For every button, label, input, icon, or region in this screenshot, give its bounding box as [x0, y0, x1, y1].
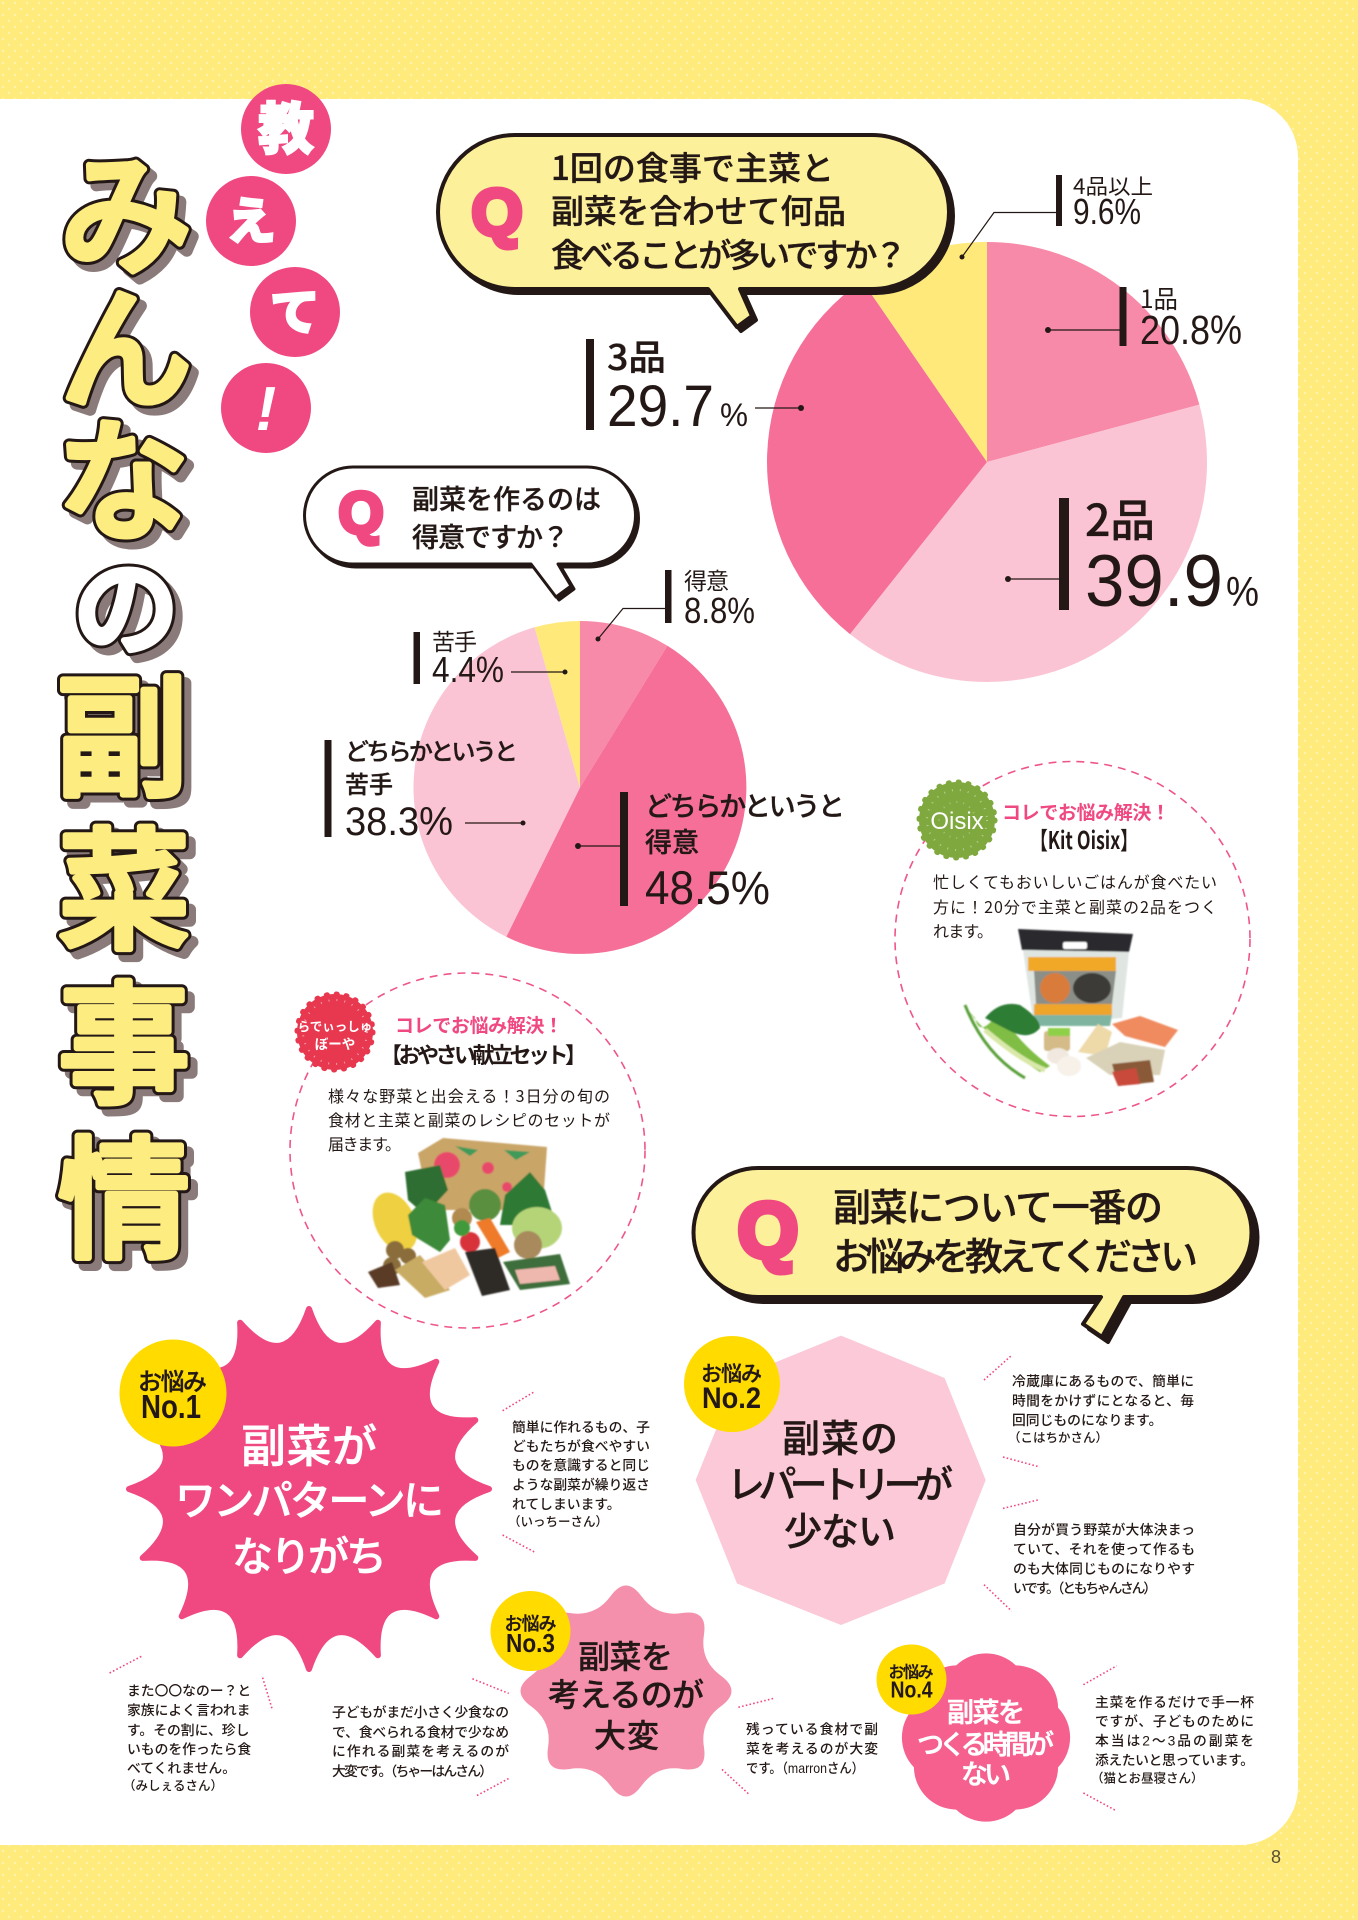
worry No.4: つくる時間が	[917, 1723, 1054, 1762]
comment: みしぇるさん: （みしぇるさん）	[123, 1779, 223, 1793]
comment: marronさん	[722, 1698, 878, 1794]
heading circles: 教えて！: て	[270, 273, 320, 345]
comment: 猫とお昼寝さん: 添えたいと思っています。	[1095, 1753, 1254, 1768]
worry No.3: 考えるのが	[548, 1670, 704, 1716]
worry No.1	[120, 1309, 489, 1669]
badge No.4: お悩み	[888, 1658, 934, 1682]
title: みんなの副菜事情: み	[60, 111, 192, 302]
comment: 猫とお昼寝さん	[1083, 1666, 1254, 1811]
badge No.3	[490, 1591, 570, 1671]
panel: Kit Oisix: 方に！20分で主菜と副菜の2品をつく	[933, 894, 1217, 918]
label: どちらかというと苦手 38.3%: 苦手	[345, 765, 393, 800]
speech bubble: question 3: Q	[738, 1186, 798, 1274]
icon: Radish Boya stamp	[297, 994, 373, 1070]
comment: 猫とお昼寝さん: 本当は2～3品の副菜を	[1095, 1734, 1254, 1748]
comment: ちゃーはんさん	[332, 1679, 509, 1796]
label: 2品 39.9%: %	[1226, 568, 1259, 615]
badge No.1	[120, 1340, 226, 1446]
label: どちらかというと苦手 38.3%: どちらかというと	[345, 732, 518, 767]
pie chart: dishes per meal	[767, 242, 1207, 682]
panel: Kit Oisix: れます。	[933, 918, 993, 942]
title: みんなの副菜事情: 情	[65, 1102, 197, 1293]
comment: marronさん: 菜を考えるのが大変	[746, 1740, 878, 1756]
comment: 猫とお昼寝さん: ですが、子どものために	[1095, 1713, 1254, 1729]
label: 2品 39.9%: 2品	[1085, 485, 1155, 549]
octagon shape	[696, 1336, 986, 1625]
comment: みしぇるさん: いものを作ったら食	[127, 1742, 251, 1757]
title: みんなの副菜事情: ん	[67, 252, 199, 443]
worry No.1: ワンパターンに	[175, 1467, 444, 1527]
worry No.2: 少ない	[784, 1501, 896, 1556]
worry No.1: なりがち	[232, 1523, 387, 1583]
label: 1品 20.8%: 20.8%	[1140, 307, 1242, 353]
panel: おやさい献立セット	[290, 973, 645, 1328]
comment: いっちーさん	[503, 1392, 650, 1552]
photo: vegetable box	[364, 1138, 570, 1298]
title: みんなの副菜事情: み	[67, 118, 199, 309]
panel: おやさい献立セット: 【おやさい献立セット】	[380, 1038, 587, 1070]
title: みんなの副菜事情: 菜	[58, 786, 190, 977]
comment: こはちかさん: 回同じものになります。	[1012, 1413, 1162, 1428]
icon: Radish Boya stamp: らでぃっしゅ	[298, 1016, 372, 1035]
title: みんなの副菜事情: な	[57, 377, 189, 568]
burst shape	[129, 1309, 489, 1669]
label: 得意 8.8%: 得意	[684, 562, 729, 596]
comment: みしぇるさん: また〇〇なのー？と	[127, 1684, 251, 1698]
title: みんなの副菜事情: 副	[56, 633, 188, 824]
comment: ちゃーはんさん: 子どもがまだ小さく少食なの	[332, 1704, 509, 1720]
title: みんなの副菜事情: 事	[58, 940, 190, 1131]
comment: みしぇるさん: す。その割に、珍し	[127, 1722, 249, 1738]
comment: いっちーさん: ような副菜が繰り返さ	[512, 1476, 650, 1492]
label: 4品以上 9.6%	[960, 171, 1153, 260]
label: どちらかというと苦手 38.3%	[324, 732, 526, 844]
title: みんなの副菜事情: 菜	[65, 793, 197, 984]
speech bubble: question 1: 1回の食事で主菜と	[551, 142, 834, 190]
comment: いっちーさん: （いっちーさん）	[508, 1515, 608, 1529]
comment: こはちかさん	[984, 1355, 1194, 1467]
label: どちらかというと得意 48.5%: 得意	[645, 821, 699, 860]
comment: ともちゃんさん	[984, 1500, 1195, 1611]
speech bubble: question 2: Q	[338, 481, 384, 546]
title: みんなの副菜事情: 事	[65, 947, 197, 1138]
worry No.2: レパートリーが	[727, 1454, 953, 1509]
title: みんなの副菜事情: な	[57, 377, 189, 568]
title: みんなの副菜事情: 副	[56, 633, 188, 824]
badge No.1: お悩み	[138, 1362, 207, 1397]
comment: marronさん: です。（marronさん）	[746, 1761, 864, 1776]
comment: marronさん: 残っている食材で副	[746, 1721, 878, 1737]
badge No.3: お悩み	[504, 1610, 556, 1636]
title: みんなの副菜事情: 情	[58, 1095, 190, 1286]
badge No.3: No.3	[506, 1628, 555, 1658]
badge No.4: No.4	[890, 1676, 933, 1702]
label: どちらかというと得意 48.5%: どちらかというと	[645, 785, 845, 824]
worry No.1: 副菜が	[241, 1410, 377, 1475]
panel: おやさい献立セット: 様々な野菜と出会える！3日分の旬の	[328, 1083, 610, 1107]
speech bubble: question 3	[694, 1168, 1258, 1342]
panel: Kit Oisix	[895, 762, 1250, 1116]
panel: Kit Oisix: 【Kit Oisix】	[1030, 821, 1138, 856]
heading circles: 教えて！: 教	[258, 85, 314, 166]
comment: こはちかさん: 時間をかけずにとなると、毎	[1012, 1394, 1194, 1408]
badge No.2: No.2	[702, 1382, 761, 1415]
comment: ともちゃんさん: ていて、それを使って作るも	[1013, 1542, 1195, 1557]
comment: こはちかさん: 冷蔵庫にあるもので、簡単に	[1012, 1373, 1194, 1389]
speech bubble: question 1: 食べることが多いですか？	[551, 229, 907, 277]
comment: ともちゃんさん: 自分が買う野菜が大体決まっ	[1013, 1522, 1195, 1538]
label: 4品以上 9.6%: 9.6%	[1073, 191, 1141, 232]
panel: おやさい献立セット: 届きます。	[328, 1131, 401, 1155]
label: 2品 39.9%: 39.9	[1085, 541, 1223, 622]
worry No.4	[876, 1644, 1070, 1822]
title: みんなの副菜事情: ん	[60, 245, 192, 436]
title: みんなの副菜事情: 事	[58, 940, 190, 1131]
label: 2品 39.9%	[1005, 485, 1259, 622]
label: 苦手 4.4%: 苦手	[432, 623, 477, 657]
comment: いっちーさん: れてしまいます。	[512, 1497, 621, 1512]
comment: こはちかさん: （こはちかさん）	[1008, 1431, 1108, 1445]
title: みんなの副菜事情: ん	[60, 245, 192, 436]
page number: 8	[1271, 1847, 1281, 1867]
badge No.2: お悩み	[701, 1358, 762, 1388]
worry No.2: 副菜の	[782, 1408, 898, 1463]
label: 3品 29.7%: 29.7	[607, 374, 714, 439]
comment: みしぇるさん: べてくれません。	[127, 1761, 236, 1776]
icon: Radish Boya stamp: ぼーや	[315, 1033, 355, 1053]
panel: おやさい献立セット: 食材と主菜と副菜のレシピのセットが	[328, 1107, 610, 1131]
label: 苦手 4.4%: 4.4%	[432, 649, 504, 690]
label: どちらかというと得意 48.5%	[575, 785, 845, 914]
label: 3品 29.7%: %	[720, 397, 748, 433]
icon: Oisix stamp	[919, 782, 995, 858]
label: どちらかというと得意 48.5%: 48.5%	[645, 861, 770, 914]
title: みんなの副菜事情: の	[73, 525, 179, 677]
comment: ちゃーはんさん: 大変です。（ちゃーはんさん）	[332, 1764, 493, 1779]
worry No.3: 副菜を	[578, 1632, 673, 1678]
title: みんなの副菜事情: な	[64, 384, 196, 575]
label: 3品 29.7%: 3品	[607, 330, 666, 381]
speech bubble: question 3: 副菜について一番の	[833, 1177, 1163, 1232]
panel: Kit Oisix: コレでお悩み解決！	[1002, 798, 1170, 825]
label: 1品 20.8%	[1045, 280, 1242, 353]
label: 4品以上 9.6%: 4品以上	[1073, 171, 1153, 201]
comment: 猫とお昼寝さん: （猫とお昼寝さん）	[1091, 1772, 1204, 1786]
heading circles: 教えて！: え	[226, 182, 276, 254]
icon: Oisix stamp: Oisix	[930, 808, 984, 835]
title: みんなの副菜事情	[56, 111, 199, 1293]
speech bubble: question 2: 副菜を作るのは	[412, 478, 601, 517]
comment: ともちゃんさん: のも大体同じものになりやす	[1013, 1562, 1195, 1576]
comment: いっちーさん: 簡単に作れるもの、子	[512, 1419, 650, 1435]
heading circles: 教えて！: !	[256, 375, 276, 444]
comment: ちゃーはんさん: で、食べられる食材で少なめ	[332, 1725, 509, 1740]
title: みんなの副菜事情: の	[73, 525, 179, 677]
title: みんなの副菜事情: み	[60, 111, 192, 302]
comment: ともちゃんさん: いです。（ともちゃんさん）	[1013, 1581, 1157, 1596]
photo: meal kit	[963, 929, 1178, 1086]
flower shape	[902, 1653, 1070, 1822]
label: 得意 8.8%	[596, 562, 755, 642]
panel: おやさい献立セット: コレでお悩み解決！	[395, 1011, 563, 1038]
label: 1品 20.8%: 1品	[1140, 280, 1178, 316]
comment: みしぇるさん: 家族によく言われま	[127, 1702, 250, 1718]
heading circles: 教えて！	[206, 84, 340, 453]
comment: ちゃーはんさん: に作れる副菜を考えるのが	[332, 1743, 509, 1759]
worry No.3	[490, 1586, 731, 1796]
speech bubble: question 1: Q	[471, 175, 523, 249]
speech bubble: question 3: お悩みを教えてください	[833, 1226, 1198, 1281]
comment: 猫とお昼寝さん: 主菜を作るだけで手一杯	[1095, 1694, 1254, 1710]
comment: みしぇるさん	[110, 1656, 272, 1793]
worry No.2	[684, 1336, 986, 1625]
speech bubble: question 1: 副菜を合わせて何品	[551, 185, 846, 233]
pie chart: confidence at side dishes	[413, 621, 746, 954]
title: みんなの副菜事情: 副	[63, 640, 195, 831]
title: みんなの副菜事情: の	[80, 532, 186, 684]
badge No.4	[876, 1644, 946, 1714]
worry No.3: 大変	[594, 1711, 659, 1757]
panel: Kit Oisix: 忙しくてもおいしいごはんが食べたい	[933, 869, 1217, 893]
badge No.2	[684, 1336, 780, 1432]
comment: いっちーさん: どもたちが食べやすい	[512, 1438, 650, 1454]
label: 3品 29.7%	[586, 330, 804, 439]
speech bubble: question 2: 得意ですか？	[412, 516, 569, 555]
label: どちらかというと苦手 38.3%: 38.3%	[345, 800, 453, 844]
speech bubble: question 2	[304, 467, 638, 600]
title: みんなの副菜事情: 情	[58, 1095, 190, 1286]
label: 得意 8.8%: 8.8%	[684, 590, 755, 631]
badge No.1: No.1	[141, 1388, 201, 1425]
label: 苦手 4.4%	[414, 623, 568, 690]
title: みんなの副菜事情: 菜	[58, 786, 190, 977]
blob shape	[521, 1586, 731, 1796]
comment: いっちーさん: ものを意識すると同じ	[512, 1458, 650, 1473]
worry No.4: 副菜を	[947, 1691, 1025, 1730]
speech bubble: question 1	[438, 135, 953, 331]
worry No.4: ない	[961, 1753, 1011, 1792]
